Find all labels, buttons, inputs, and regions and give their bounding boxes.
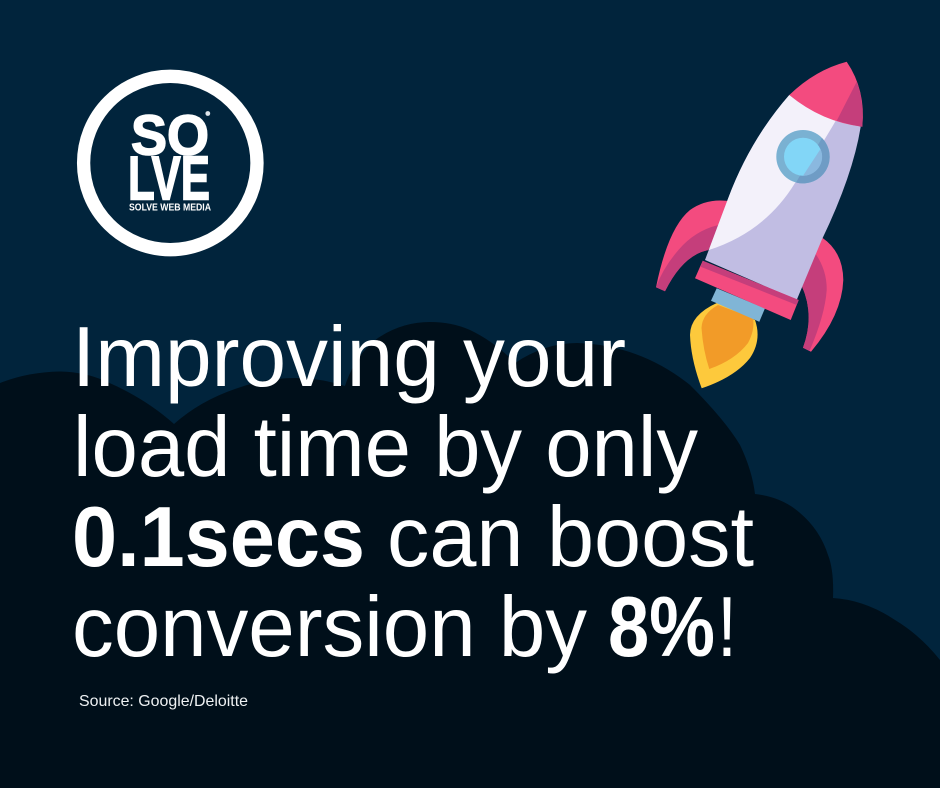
nose cone [789, 62, 863, 127]
rocket body [705, 95, 861, 300]
headline line 4: 8% [608, 580, 715, 675]
right fin shade [802, 253, 827, 351]
headline [72, 310, 754, 675]
nose cone shade [837, 82, 863, 127]
logo wordmark bottom: LVE [128, 144, 210, 214]
headline line 4: ! [717, 580, 737, 675]
dark cloud [0, 322, 940, 788]
left fin [656, 200, 733, 291]
source note: Source: Google/Deloitte [79, 693, 248, 710]
logo: Solve Web Media [84, 76, 257, 250]
headline line 1: Improving your [72, 310, 626, 405]
right fin [802, 238, 843, 352]
window glass [784, 138, 822, 176]
headline line 3: can boost [387, 490, 754, 585]
window glass shade [803, 149, 822, 176]
rocket illustration [656, 62, 863, 388]
logo wordmark top: SO [131, 104, 209, 168]
headline line 4: conversion by [72, 580, 587, 675]
nozzle [711, 288, 765, 322]
window rim [776, 130, 830, 183]
engine collar [695, 261, 799, 320]
headline line 2: load time by only [73, 400, 698, 495]
headline line 3: 0.1secs [72, 490, 365, 585]
logo ring [84, 76, 257, 250]
left fin shade [656, 224, 723, 291]
collar stripe [701, 261, 799, 305]
flame outer [690, 303, 758, 388]
porthole window [776, 130, 830, 183]
flame inner [702, 305, 753, 369]
registered mark [205, 111, 210, 116]
logo caption: SOLVE WEB MEDIA [129, 202, 211, 214]
window rim shade [796, 138, 830, 183]
body highlight [709, 95, 836, 250]
